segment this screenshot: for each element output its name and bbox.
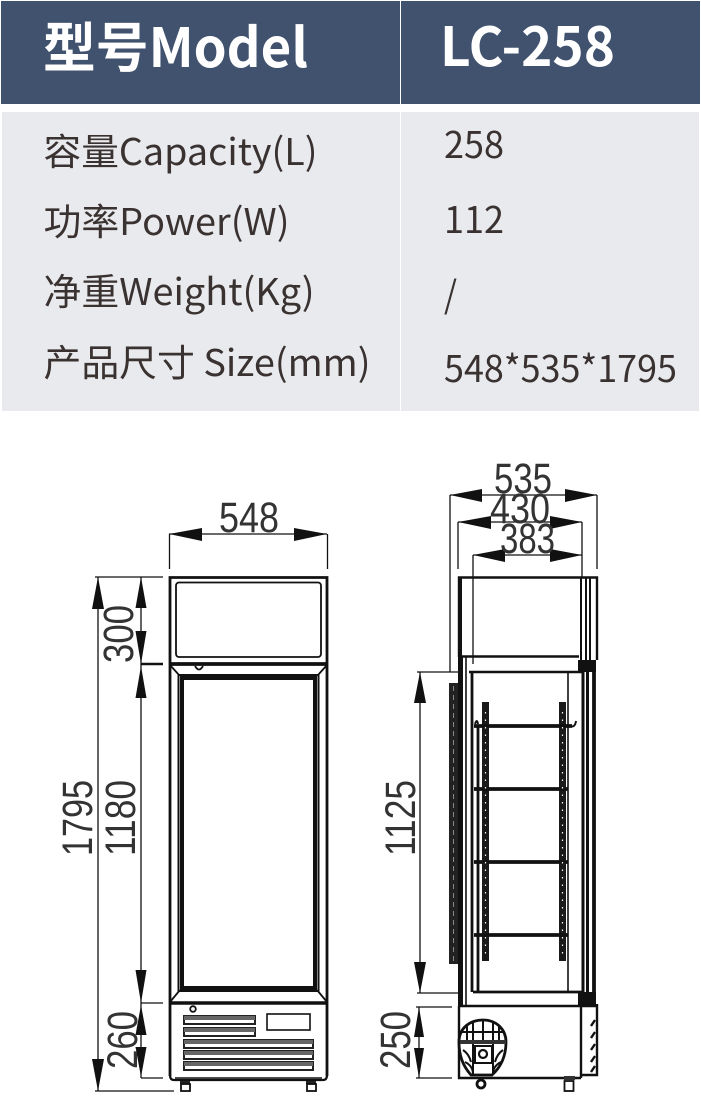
row: capacity: 258 (444, 115, 504, 169)
front dimension: height 1795: 1795 (54, 780, 102, 856)
row: weight: / (444, 265, 457, 319)
rear condenser grille (449, 683, 458, 964)
front dimension: 300 / 1180 / 260: 260 (99, 1011, 147, 1069)
front view drawing (54, 494, 328, 1091)
row: capacity (44, 115, 504, 176)
top light box (170, 582, 327, 675)
row: size: 548*535*1795 (444, 339, 677, 393)
side dimension: 250 (372, 1007, 452, 1078)
side view drawing (372, 455, 597, 1091)
front dimension: width 548 (169, 494, 328, 569)
side dimension: 535 (450, 455, 597, 672)
glass door frame (170, 675, 327, 1003)
table header row (1, 1, 700, 104)
header label: model: 型号Model (43, 4, 308, 83)
side dimension: 1125: 1125 (377, 780, 425, 856)
row: size (44, 333, 677, 393)
front dimension: 300 / 1180 / 260 (95, 577, 163, 1078)
side dimension: 383: 383 (500, 515, 555, 563)
side dimension: 535: 535 (494, 455, 552, 503)
header value: model number: LC-258 (440, 3, 615, 82)
side dimension: 1125 (377, 672, 460, 993)
front dimension: 300 / 1180 / 260: 300 (95, 605, 143, 663)
row: weight (44, 262, 457, 319)
side dimension: 383 (473, 515, 582, 664)
row: weight: 净重Weight(Kg) (44, 262, 314, 316)
cabinet outline (170, 578, 327, 1076)
row: power (44, 190, 504, 246)
side foot (564, 1076, 575, 1091)
front dimension: 300 / 1180 / 260: 1180 (97, 780, 145, 856)
row: capacity: 容量Capacity(L) (44, 122, 318, 176)
table body background (2, 112, 699, 411)
side dimension: 430: 430 (490, 485, 550, 533)
row: power: 112 (444, 190, 504, 244)
interior shelves and uprights (472, 672, 582, 992)
front dimension: height 1795 (54, 577, 174, 1091)
side dimension: 430 (458, 485, 582, 577)
base section with fan (459, 1004, 597, 1091)
fan motor guard (459, 1020, 506, 1088)
side dimension: 250: 250 (372, 1011, 420, 1069)
row: size: 产品尺寸 Size(mm) (44, 333, 371, 387)
base unit with vents (170, 1006, 327, 1091)
front dimension: width 548: 548 (219, 494, 279, 542)
row: power: 功率Power(W) (44, 192, 290, 246)
side cabinet outline (458, 577, 597, 1006)
